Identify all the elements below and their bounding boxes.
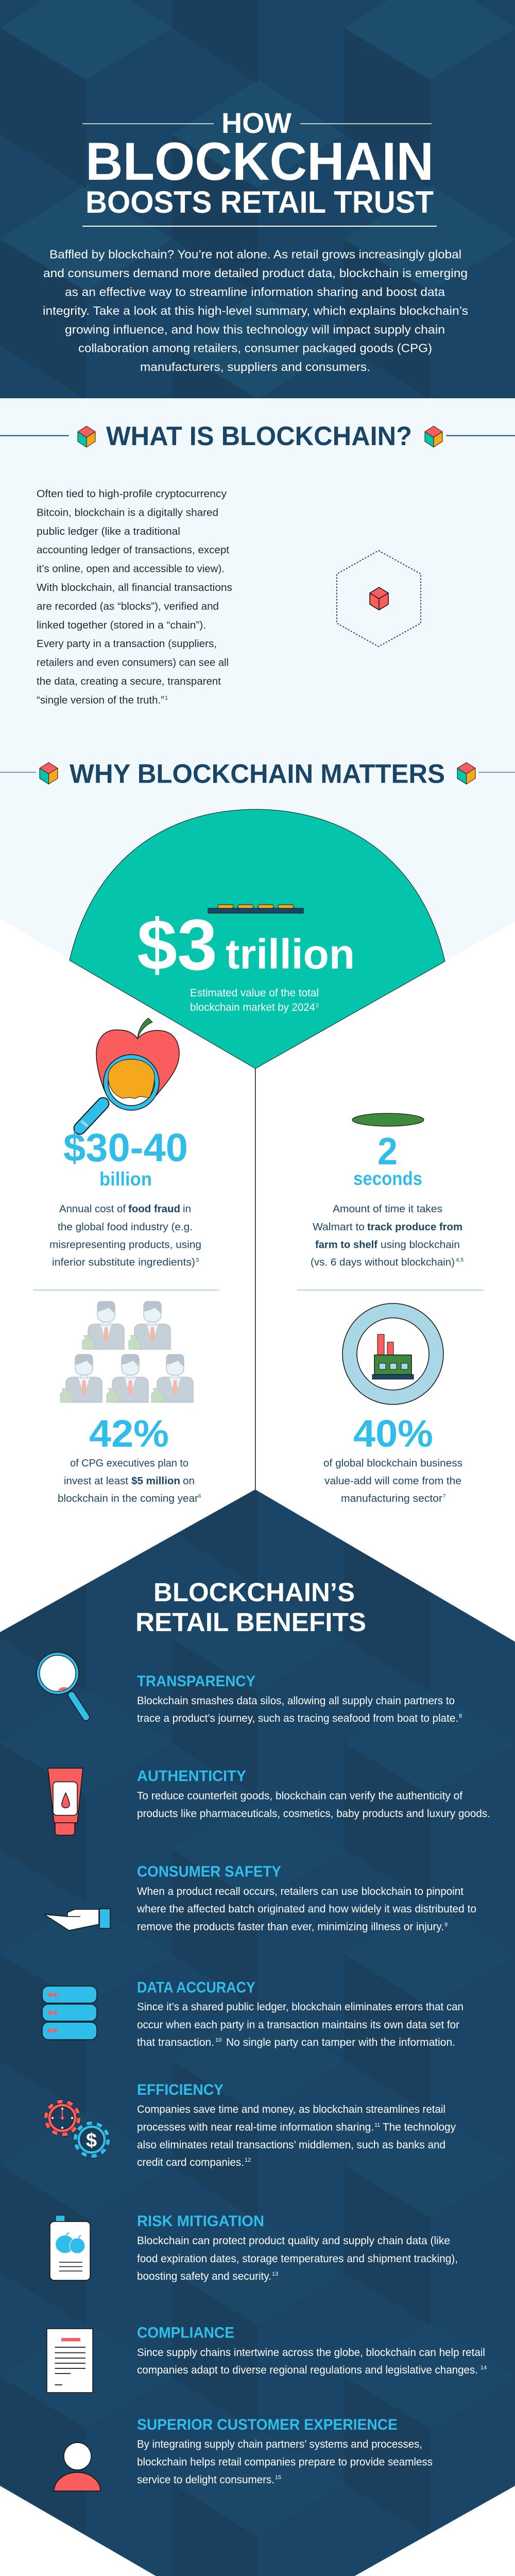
definition text: retailers and even consumers) can see all [37,657,229,669]
benefit: risk mitigation: Blockchain can protect product quality and supply chain data (like [137,2235,450,2247]
benefit: superior customer experience: service to delight consumers. [137,2474,274,2486]
benefit: consumer safety: CONSUMER SAFETY [137,1863,281,1880]
stat: food fraud: $30-40 [63,1126,188,1170]
benefit: data accuracy: 10 [215,2037,221,2043]
stat: 40 percent [323,1303,462,1504]
stat: $3 trillion teal shape [70,809,445,1069]
text: manufacturing description: 7 [443,1494,446,1499]
definition text: With blockchain, all financial transactions [37,582,232,594]
benefit: efficiency: processes with near real-time information sharing. [137,2122,374,2133]
benefit: data accuracy: No single party can tamper with the information. [226,2037,455,2048]
heading: why blockchain matters: WHY BLOCKCHAIN MATTERS [70,759,445,789]
stat: 40 percent: 40% [353,1412,433,1455]
benefit: risk mitigation: 13 [272,2271,278,2277]
stat: $3 trillion teal shape: blockchain market by 2024 [190,1002,315,1013]
benefit: data accuracy: DATA ACCURACY [137,1979,255,1996]
icon: green ellipse [352,1113,424,1126]
definition text: Every party in a transaction (suppliers, [37,638,217,650]
text: food fraud description: 3 [196,1257,199,1263]
benefit: superior customer experience: By integrating supply chain partners’ systems and processes, [137,2438,422,2450]
text: manufacturing description: value-add will come from the [324,1476,461,1487]
benefit: transparency: TRANSPARENCY [137,1673,255,1690]
benefit: authenticity: To reduce counterfeit goods, blockchain can verify the authenticity of [137,1790,462,1802]
benefit: risk mitigation [50,2213,458,2282]
definition text: 1 [165,695,168,701]
definition text: the data, creating a secure, transparent [37,676,221,687]
intro text: Baffled by blockchain? You’re not alone. As retail grows increasingly global [49,248,461,261]
benefit: data accuracy: occur when each party in a transaction maintains its own data set for [137,2019,459,2031]
text: food fraud description: misrepresenting products, using [49,1240,201,1251]
benefit: compliance [47,2325,487,2393]
benefit: efficiency: 12 [245,2157,251,2163]
intro text: growing influence, and how this technology will impact supply chain [65,323,445,336]
benefit: data accuracy [42,1979,464,2048]
text: CPG executives description: invest at least [64,1476,128,1487]
panel: why blockchain matters [0,759,515,1504]
intro text: and consumers demand more detailed product data, blockchain is emerging [43,266,468,280]
definition text: are recorded (as “blocks”), verified and [37,601,219,612]
icon: five executives with money bags [60,1301,193,1402]
benefit: efficiency: also eliminates retail transactions’ middlemen, such as banks and [137,2139,445,2151]
text: walmart tracking description: (vs. 6 days without blockchain) [311,1257,455,1268]
definition text: Often tied to high-profile cryptocurrency [37,488,227,500]
heading: retail benefits: BLOCKCHAIN’S [153,1578,355,1607]
stat: $3 trillion teal shape: 2 [316,1003,319,1009]
text: CPG executives description: $5 million [131,1476,180,1487]
text: CPG executives description: on [183,1476,195,1487]
definition text: accounting ledger of transactions, except [37,545,229,556]
icon: food tag [50,2215,90,2280]
icon: server stack [42,1986,97,2040]
stat: $3 trillion teal shape: trillion [226,931,355,978]
text: walmart tracking description: using blockchain [381,1240,460,1251]
text: walmart tracking description: Amount of time it takes [333,1204,442,1215]
stat: $3 trillion teal shape: Estimated value of the total [190,987,319,999]
text: food fraud description: inferior substitute ingredients) [52,1257,195,1268]
benefit: risk mitigation: boosting safety and security. [137,2270,271,2282]
text: CPG executives description: blockchain in the coming year [58,1493,198,1504]
icon: apple under magnifier [80,1018,179,1128]
intro text: as an effective way to streamline information sharing and boost data [65,285,445,299]
benefit: consumer safety: remove the products faster than ever, minimizing illness or injury. [137,1921,444,1933]
definition text: it’s online, open and accessible to view). [37,564,225,575]
heading: retail benefits: RETAIL BENEFITS [135,1607,366,1637]
benefit: transparency: Blockchain smashes data silos, allowing all supply chain partners to [137,1695,455,1707]
text: walmart tracking description: farm to shelf [315,1240,377,1251]
benefit: authenticity: AUTHENTICITY [137,1768,246,1785]
benefit: superior customer experience: 15 [275,2475,281,2481]
heading: retail benefits [135,1578,366,1637]
icon: clock and dollar gears [46,2102,108,2156]
text: manufacturing description [323,1458,462,1504]
icon: block in dotted hexagon [337,551,421,647]
benefit: superior customer experience: SUPERIOR CUSTOMER EXPERIENCE [137,2416,398,2433]
title: HOW [221,107,291,139]
benefit: efficiency: Companies save time and money, as blockchain streamlines retail [137,2104,445,2115]
benefit: efficiency: 11 [374,2122,380,2128]
benefit: transparency: trace a product’s journey, such as tracing seafood from boat to plate. [137,1713,458,1724]
definition text: Bitcoin, blockchain is a digitally shared [37,507,218,518]
icon: cosmetic tube [48,1768,83,1835]
panel: header [0,0,515,398]
text: CPG executives description [58,1458,201,1504]
intro text [43,248,468,374]
title: BOOSTS RETAIL TRUST [85,185,434,219]
benefit: consumer safety [44,1863,476,1933]
heading: what is blockchain [0,421,515,451]
benefit: transparency [37,1652,462,1724]
text: walmart tracking description [311,1204,464,1268]
benefit: efficiency: The technology [383,2122,456,2133]
benefit: risk mitigation: RISK MITIGATION [137,2213,264,2230]
icon: magnifier [37,1652,86,1717]
heading: what is blockchain: WHAT IS BLOCKCHAIN? [106,421,412,451]
definition text [37,488,232,706]
definition text: “single version of the truth.” [37,694,164,706]
text: walmart tracking description: 4,5 [456,1257,464,1263]
text: food fraud description: the global food industry (e.g. [58,1222,193,1233]
text: walmart tracking description: track produce from [367,1222,462,1233]
title [82,107,437,227]
benefit: efficiency: credit card companies. [137,2157,244,2168]
benefit: data accuracy: that transaction. [137,2037,214,2048]
text: manufacturing description: of global blockchain business [323,1458,462,1469]
definition text: linked together (stored in a “chain”). [37,620,206,631]
benefit: compliance: companies adapt to diverse regional regulations and legislative changes. [137,2364,478,2376]
benefit: risk mitigation: food expiration dates, storage temperatures and shipment tracking), [137,2253,458,2265]
text: food fraud description: food fraud [128,1204,180,1215]
benefit: superior customer experience: blockchain helps retail companies prepare to provide seamless [137,2456,433,2468]
intro text: integrity. Take a look at this high-level summary, which explains blockchain’s [43,304,468,317]
benefit: consumer safety: 9 [444,1922,448,1928]
text: CPG executives description: of CPG executives plan to [70,1458,188,1469]
stat: 2 seconds: seconds [353,1168,422,1189]
icon: factory in ring [342,1303,443,1404]
icon: document [47,2329,93,2393]
stat: food fraud: billion [99,1168,152,1190]
text: food fraud description [49,1204,201,1268]
benefit: consumer safety: where the affected batch originated and how widely it was distributed to [136,1903,476,1915]
text: food fraud description: Annual cost of [59,1204,126,1215]
intro text: manufacturers, suppliers and consumers. [140,360,370,374]
definition text: public ledger (like a traditional [37,526,180,537]
text: CPG executives description: 6 [198,1494,201,1499]
benefit: authenticity: products like pharmaceuticals, cosmetics, baby products and luxury goods. [137,1808,490,1820]
text: manufacturing description: manufacturing sector [341,1493,442,1504]
benefit: data accuracy: Since it’s a shared public ledger, blockchain eliminates errors that can [137,2001,464,2013]
title: BLOCKCHAIN [85,132,434,192]
benefit: efficiency [46,2081,456,2168]
stat: 42 percent [58,1301,201,1504]
stat: 42 percent: 42% [89,1412,169,1455]
intro text: collaboration among retailers, consumer packaged goods (CPG) [78,342,432,355]
benefit: compliance: COMPLIANCE [137,2325,234,2341]
icon: clock and dollar gears: $ [86,2130,97,2151]
benefit: efficiency: EFFICIENCY [137,2081,224,2098]
benefit: transparency: 8 [459,1713,462,1719]
stat: $3 trillion teal shape: $3 [137,904,217,985]
text: walmart tracking description: Walmart to [313,1222,365,1233]
icon: open hand [44,1909,110,1930]
panel: retail benefits [0,1489,515,2576]
text: food fraud description: in [183,1204,191,1215]
benefit: compliance: 14 [480,2365,487,2371]
benefit: compliance: Since supply chains intertwine across the globe, blockchain can help retail [137,2347,485,2359]
stat: 2 seconds [311,1113,464,1268]
benefit: superior customer experience [54,2416,433,2491]
stat: 2 seconds: 2 [377,1130,398,1173]
icon: customer [54,2443,100,2491]
benefit: authenticity [48,1768,490,1835]
benefit: consumer safety: When a product recall occurs, retailers can use blockchain to pinpoint [137,1886,464,1897]
panel: what is blockchain [0,421,515,706]
stat: food fraud [49,1018,201,1268]
